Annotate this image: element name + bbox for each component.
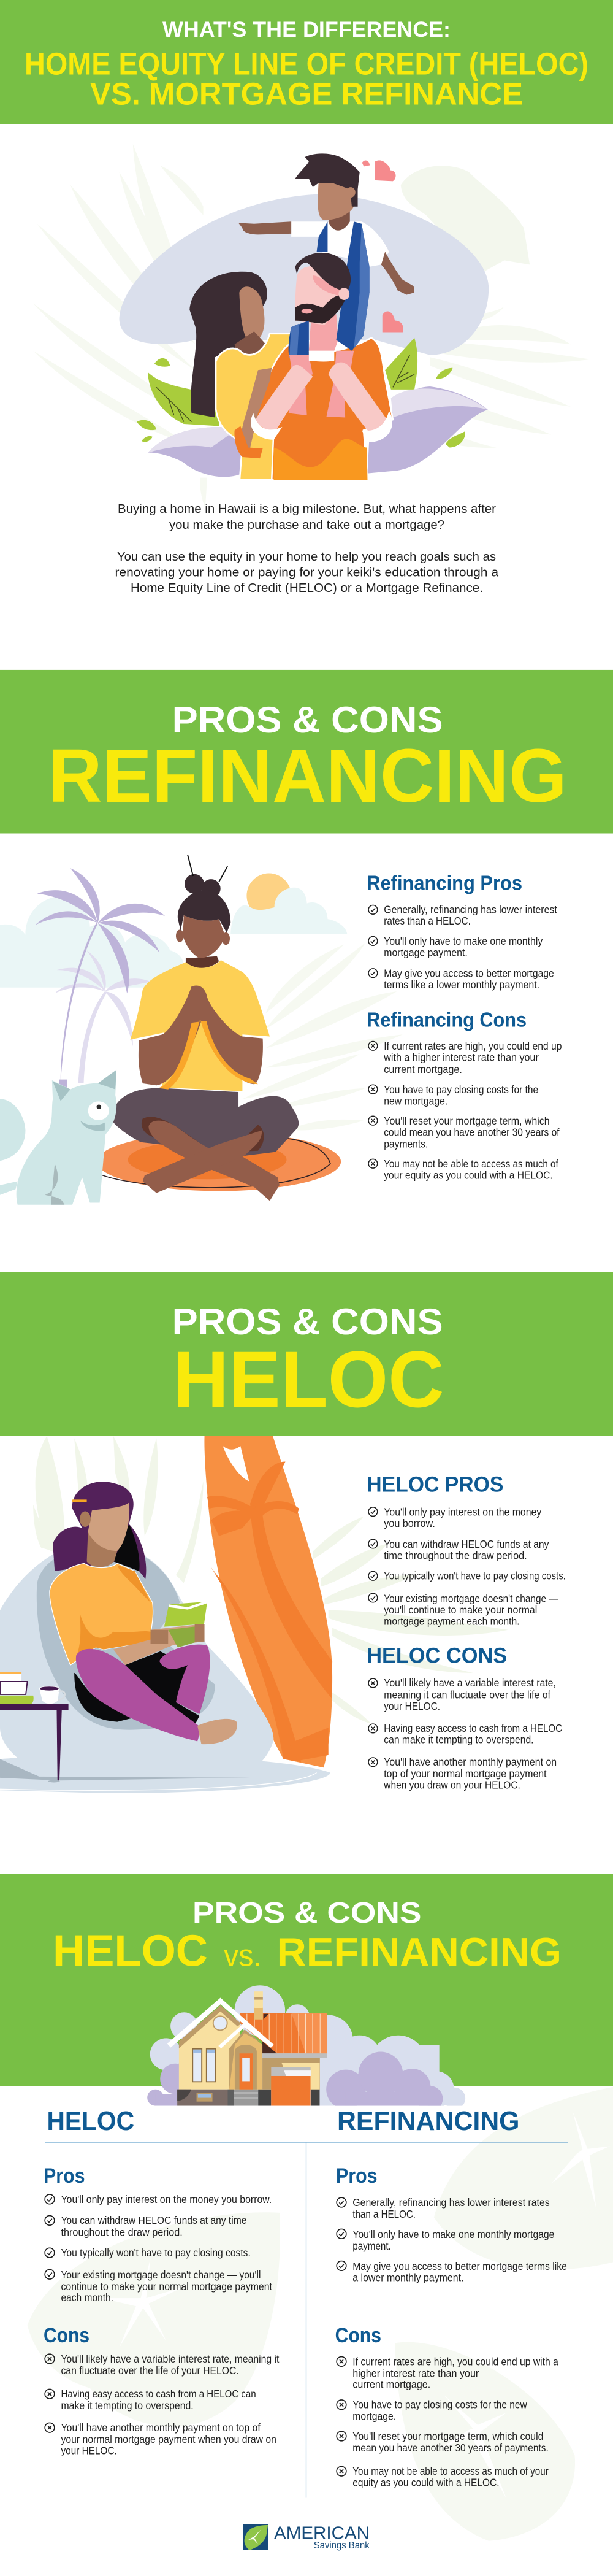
column headings: [45, 2106, 568, 2498]
refinancing pros column: than a HELOC.: [352, 2208, 416, 2220]
refinancing pros: Refinancing Pros: [367, 872, 522, 894]
refinancing banner: [0, 670, 613, 833]
heloc cons column: Having easy access to cash from a HELOC can: [61, 2388, 256, 2400]
intro text: you make the purchase and take out a mortgage?: [169, 518, 444, 532]
section: refinancing: [0, 670, 613, 1205]
refinancing pros: May give you access to better mortgage: [384, 967, 554, 980]
refinancing cons: [367, 1009, 562, 1182]
refinancing pros column: You'll only have to make one monthly mortgage: [352, 2228, 554, 2240]
refinancing cons: Refinancing Cons: [367, 1009, 527, 1032]
heloc pros: Your existing mortgage doesn't change —: [384, 1592, 558, 1604]
refinancing cons column: If current rates are high, you could end up with a: [352, 2355, 558, 2367]
refinancing pros: rates than a HELOC.: [384, 915, 471, 927]
title banner: [0, 0, 613, 124]
heloc pros column: each month.: [61, 2291, 113, 2304]
heloc pros: time throughout the draw period.: [384, 1549, 527, 1561]
column headings: HELOC: [47, 2106, 134, 2136]
refinancing cons: You'll reset your mortgage term, which: [384, 1115, 550, 1127]
comparison banner: PROS & CONS: [192, 1897, 422, 1929]
refinancing cons: with a higher interest rate than your: [383, 1052, 539, 1064]
heloc pros: mortgage payment each month.: [384, 1615, 520, 1627]
heloc cons: HELOC CONS: [367, 1644, 507, 1667]
heloc cons: [367, 1644, 562, 1791]
refinancing pros column: [336, 2164, 567, 2283]
heloc cons: You'll likely have a variable interest rate,: [384, 1677, 556, 1689]
heloc pros column: Pros: [44, 2164, 85, 2188]
background leaves: [28, 2087, 613, 2541]
heloc cons column: can fluctuate over the life of your HELOC.: [61, 2364, 239, 2377]
refinancing pros column: payment.: [352, 2240, 391, 2252]
intro text: [115, 502, 499, 595]
heloc banner: HELOC: [173, 1334, 444, 1424]
intro text: Buying a home in Hawaii is a big milestone. But, what happens after: [118, 502, 496, 516]
heloc pros column: You'll only pay interest on the money you borrow.: [61, 2193, 272, 2205]
refinancing pros: You'll only have to make one monthly: [384, 935, 543, 947]
heloc pros column: throughout the draw period.: [61, 2226, 183, 2238]
refinancing cons column: higher interest rate than your: [352, 2367, 479, 2379]
heloc cons: You'll have another monthly payment on: [384, 1756, 557, 1768]
logo: American Savings Bank: [243, 2524, 370, 2551]
refinancing cons: your equity as you could with a HELOC.: [384, 1169, 553, 1182]
illustration: meditating woman with cat: [0, 855, 403, 1205]
illustration: family: [33, 144, 590, 508]
refinancing cons: current mortgage.: [384, 1063, 462, 1075]
title banner: WHAT'S THE DIFFERENCE:: [162, 18, 451, 42]
intro text: You can use the equity in your home to help you reach goals such as: [117, 550, 496, 564]
heloc pros: you'll continue to make your normal: [384, 1604, 537, 1616]
heloc cons: Having easy access to cash from a HELOC: [384, 1722, 562, 1734]
heloc cons column: your normal mortgage payment when you draw on: [61, 2433, 276, 2445]
refinancing cons column: mortgage.: [352, 2410, 396, 2423]
section: comparison: [0, 1874, 613, 2551]
comparison banner: HELOC: [53, 1926, 208, 1975]
heloc pros: you borrow.: [384, 1517, 435, 1529]
heloc cons: your HELOC.: [384, 1700, 440, 1712]
intro text: renovating your home or paying for your keiki's education through a: [115, 566, 499, 579]
refinancing cons column: [335, 2324, 558, 2488]
refinancing banner: PROS & CONS: [172, 699, 443, 740]
heloc cons: meaning it can fluctuate over the life of: [384, 1688, 550, 1701]
column headings: REFINANCING: [337, 2106, 520, 2136]
refinancing pros column: Pros: [336, 2164, 378, 2188]
refinancing cons column: You may not be able to access as much of your: [352, 2465, 549, 2477]
heloc cons column: You'll have another monthly payment on top of: [61, 2421, 261, 2434]
comparison banner: vs.: [224, 1939, 262, 1973]
refinancing cons: You may not be able to access as much of: [384, 1158, 558, 1170]
title banner: VS. MORTGAGE REFINANCE: [90, 76, 523, 112]
heloc pros column: You can withdraw HELOC funds at any time: [61, 2214, 246, 2226]
refinancing cons: If current rates are high, you could end up: [384, 1040, 562, 1052]
heloc pros column: You typically won't have to pay closing costs.: [61, 2247, 251, 2259]
logo: American Savings Bank: Savings Bank: [314, 2540, 370, 2551]
refinancing pros: terms like a lower monthly payment.: [384, 978, 539, 991]
logo: American Savings Bank: AMERICAN: [274, 2524, 370, 2543]
heloc banner: [0, 1272, 613, 1436]
refinancing banner: REFINANCING: [48, 734, 567, 818]
heloc cons: top of your normal mortgage payment: [384, 1767, 547, 1780]
comparison banner: REFINANCING: [277, 1929, 562, 1974]
heloc cons column: [44, 2324, 280, 2456]
refinancing cons column: equity as you could with a HELOC.: [352, 2476, 499, 2488]
heloc cons: can make it tempting to overspend.: [384, 1734, 534, 1746]
heloc pros: You can withdraw HELOC funds at any: [384, 1538, 549, 1550]
refinancing pros: Generally, refinancing has lower interest: [384, 904, 557, 916]
heloc pros: HELOC PROS: [367, 1473, 503, 1497]
comparison banner: [0, 1874, 613, 2086]
intro text: Home Equity Line of Credit (HELOC) or a Mortgage Refinance.: [131, 582, 483, 595]
refinancing cons: payments.: [384, 1138, 428, 1150]
heloc cons column: Cons: [44, 2324, 89, 2347]
refinancing cons column: current mortgage.: [352, 2378, 430, 2391]
section: intro: [0, 0, 613, 595]
refinancing cons: could mean you have another 30 years of: [384, 1126, 560, 1138]
refinancing cons column: Cons: [335, 2324, 381, 2347]
heloc pros: You typically won't have to pay closing costs.: [384, 1569, 566, 1582]
heloc pros column: Your existing mortgage doesn't change — you'll: [61, 2269, 261, 2281]
refinancing cons: You have to pay closing costs for the: [384, 1083, 538, 1096]
refinancing cons: new mortgage.: [384, 1094, 447, 1107]
heloc pros: [367, 1473, 566, 1627]
section: heloc: [0, 1272, 613, 1793]
heloc pros column: continue to make your normal mortgage payment: [61, 2280, 272, 2293]
illustration: woman reading with surfboard: [0, 1436, 508, 1793]
refinancing cons column: You have to pay closing costs for the new: [352, 2399, 527, 2411]
refinancing pros column: Generally, refinancing has lower interest rates: [352, 2196, 550, 2209]
heloc pros: You'll only pay interest on the money: [384, 1506, 542, 1518]
heloc pros column: [44, 2164, 272, 2304]
refinancing cons column: You'll reset your mortgage term, which could: [352, 2430, 543, 2442]
heloc banner: PROS & CONS: [172, 1301, 443, 1342]
refinancing cons column: mean you have another 30 years of payments.: [352, 2442, 549, 2454]
refinancing pros column: a lower monthly payment.: [352, 2271, 463, 2283]
refinancing pros: mortgage payment.: [384, 947, 468, 959]
heloc cons column: make it tempting to overspend.: [61, 2399, 194, 2412]
heloc cons column: You'll likely have a variable interest rate, meaning it: [61, 2353, 280, 2365]
refinancing pros column: May give you access to better mortgage terms like: [352, 2260, 567, 2272]
illustration: house: [147, 1985, 465, 2112]
heloc cons: when you draw on your HELOC.: [383, 1779, 520, 1791]
refinancing pros: [367, 872, 557, 991]
heloc cons column: your HELOC.: [61, 2444, 117, 2456]
